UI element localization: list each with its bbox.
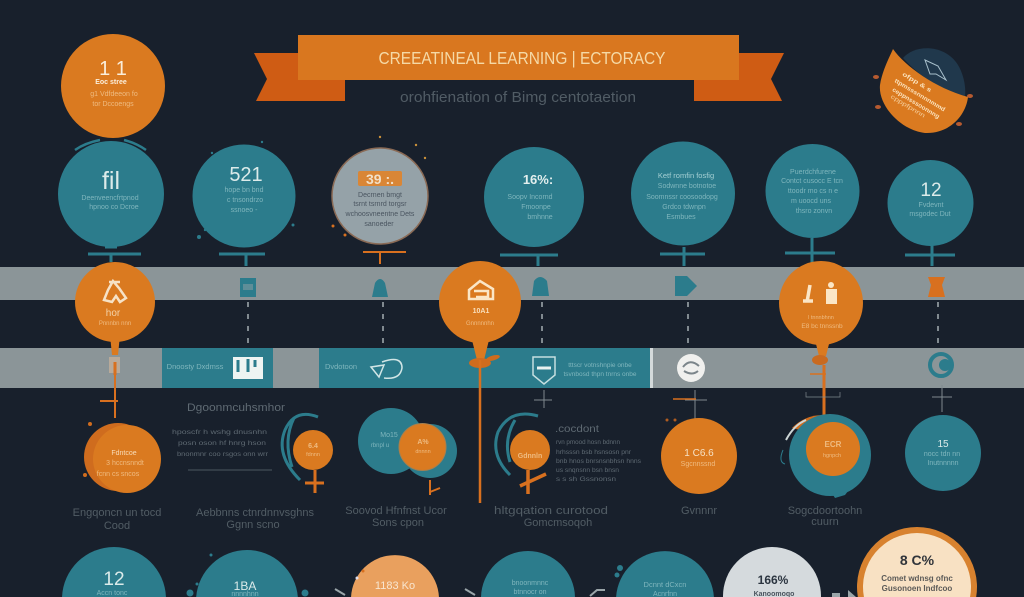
bottom teal circle 1: [62, 547, 166, 597]
swirl circle left: 6.4: [308, 443, 318, 450]
grey circle 3: wchoosvneentne Dets: [345, 211, 415, 218]
teal circle 6: Contct cusocc E tcn: [781, 178, 843, 185]
teal circle 4: 16%:: [523, 172, 553, 187]
grey circle 3: sanoeder: [364, 221, 394, 228]
orange double circle: 3 hccnsnndt: [106, 460, 144, 467]
teal circle 7: [888, 160, 974, 266]
teal and orange bubble: Mo15: [380, 432, 398, 439]
label 6: Sogcdoortoohn: [788, 505, 862, 517]
teal circle 6: thsro zonvn: [796, 208, 832, 215]
teal circle 6: m uoocd uns: [791, 198, 832, 205]
label 1: Engqoncn un tocd: [73, 507, 161, 519]
label 3: Sons cpon: [372, 517, 424, 529]
grey circle 3: Decrnen bmgt: [358, 192, 402, 199]
teal circle 7: 12: [920, 180, 942, 201]
top-right bowl badge: [873, 48, 973, 133]
title banner: CREEATINEAL LEARNING | ECTORACY: [378, 48, 666, 68]
teal circle 5: Soomnssr coosoodopg: [646, 194, 718, 201]
teal stat circle: nocc tdn nn: [924, 451, 960, 458]
orange stat circle: 1 C6.6: [684, 448, 714, 459]
text block: decomposition: Dgoonmcuhsmhor: [187, 402, 285, 414]
teal circle 5: Esmbues: [666, 214, 696, 221]
cluster circle: [781, 414, 871, 498]
teal circle 5: [631, 142, 735, 266]
orange double circle: Fdntcoe: [111, 450, 137, 457]
label 4: Gomcmsoqoh: [524, 517, 592, 529]
teal and orange bubble: dnnnn: [415, 449, 431, 455]
teal circle 2: c tnsondrzo: [227, 197, 263, 204]
teal circle 5: Ketf romfin fosfig: [658, 171, 714, 180]
top-right bowl badge: ceppnsssoonnng: [891, 87, 940, 121]
label 2: Ggnn scno: [226, 519, 280, 531]
label 6: [788, 505, 862, 528]
text block: decomposition: hposcfr h wshg dnusnhn: [172, 429, 268, 436]
bottom cream highlight circle: Comet wdnsg ofnc: [881, 574, 953, 583]
lower bar segment 1: Dnoosty Dxdmss: [167, 362, 224, 371]
text block: right: hrhsssn bsb hsnsosn pnr: [556, 449, 632, 456]
teal and orange bubble: [358, 408, 457, 495]
teal circle 1: [58, 140, 164, 262]
label 1: [73, 507, 161, 532]
orange double circle: fcnn cs sncos: [97, 471, 140, 478]
orange pin 3: E8 bc tnnssnb: [801, 323, 843, 330]
text block: right: us snqnsnn bsn bnsn: [556, 467, 619, 474]
bottom teal circle 5: [590, 551, 714, 597]
title banner: [254, 35, 784, 101]
band: upper grey timeline: [0, 267, 1024, 300]
bottom teal circle 4: bnoonmnnc: [512, 580, 549, 587]
bottom peach circle: [335, 555, 475, 597]
label 2: [196, 507, 315, 531]
cluster circle: hgnpch: [823, 453, 841, 459]
orange pin 3: [779, 261, 863, 415]
lower bar white rosette: [677, 354, 705, 382]
text block: right: s s sh Gssnonsn: [556, 476, 616, 483]
orange stat circle: [661, 418, 737, 494]
orange double circle: [83, 422, 161, 493]
connectors: [248, 302, 938, 348]
icon: upper bar teal tag: [675, 276, 697, 296]
top-left orange stat circle: g1 Vdfdeeon fo: [90, 91, 138, 98]
icon: upper bar orange badge: [928, 277, 945, 297]
label 5: Gvnnnr: [681, 505, 717, 517]
teal and orange bubble: A%: [417, 439, 429, 446]
teal circle 5: Sodwnne botnotoe: [658, 183, 716, 190]
lower bar segment 1: [167, 357, 263, 379]
text block: decomposition: [172, 402, 285, 470]
bottom teal circle 2: 1BA: [234, 579, 256, 593]
teal circle 4: bmhnne: [527, 214, 553, 221]
teal circle 2: 521: [229, 164, 263, 186]
text block: decomposition: bnonmnr coo rsgos onn wrr: [177, 451, 269, 458]
teal circle 2: ssnoeo -: [231, 207, 258, 214]
top-left orange stat circle: 1 1: [99, 58, 127, 80]
text block: decomposition: posn oson hf hnrg hson: [178, 440, 266, 447]
teal circle 1: Deenveencfrtpnod: [81, 195, 139, 202]
bottom cream highlight circle: 8 C%: [900, 552, 935, 568]
top-left orange stat circle: tor Dccoengs: [92, 101, 134, 108]
teal stat circle: 15: [937, 439, 949, 450]
teal circle 1: hpnoo co Dcroe: [89, 204, 139, 211]
bottom teal circle 4: btnnocr on: [513, 589, 547, 596]
teal circle 4: Fmoonpe: [521, 204, 551, 211]
bottom cream highlight circle: Gusonoen Indfcoo: [882, 584, 952, 593]
teal circle 1: fil: [102, 167, 120, 195]
orange pin 2: [439, 261, 521, 503]
label 4: [494, 505, 608, 529]
teal and orange bubble: rbnpl u: [371, 443, 389, 449]
orange pin 1: Pnnnbn nnn: [99, 321, 131, 327]
icon: upper bar teal dome: [372, 279, 388, 297]
orange pin 2: Gnnnnnhn: [466, 321, 494, 327]
orange stat circle: Sgcnnssnd: [681, 461, 715, 468]
text block: right: .cocdont: [555, 424, 599, 435]
lower bar segment 2: [325, 360, 402, 378]
bottom teal circle 2: [186, 550, 308, 597]
lower bar segment 3: tsvnbosd thpn tnrns onbe: [564, 371, 637, 378]
cluster circle: ECR: [825, 440, 842, 449]
teal circle 4: Soopv Incornd: [507, 194, 553, 201]
top-left orange stat circle: [61, 34, 165, 138]
small connector ticks: [534, 385, 952, 420]
top-left orange stat circle: Eoc stree: [95, 79, 127, 86]
teal circle 2: hope bn bnd: [225, 187, 264, 194]
teal circle 6: ttoodr mo cs n e: [788, 188, 838, 195]
grey circle 3: 39 :.: [366, 171, 394, 187]
arrow icon: [832, 590, 856, 597]
icon: upper bar teal book: [240, 278, 256, 297]
bottom teal circle 5: Dcnnt dCxcn: [644, 580, 686, 589]
orange pin 1: [75, 262, 155, 418]
label 4: hltgqation curotood: [494, 505, 608, 517]
orange pin 1: hor: [106, 308, 121, 319]
swirl circle right: Gdnnln: [518, 453, 542, 460]
top-right bowl badge: cpppfpnnn: [889, 94, 926, 119]
swirl circle left: fdnnn: [306, 452, 320, 458]
swirl circle right: [496, 414, 550, 494]
teal circle 6: [766, 144, 860, 264]
lower bar teal ring: [930, 354, 952, 376]
bottom teal circle 1: Accn tonc: [97, 590, 128, 597]
teal stat circle: [905, 415, 981, 491]
lower bar segment 3: tttscr votnshnpie onbe: [568, 362, 632, 369]
lower bar segment 3: [533, 357, 637, 384]
top-right bowl badge: ofpp & s: [901, 72, 933, 94]
top-right bowl badge: ttpmsssnnnnmmd: [893, 78, 946, 114]
lower bar segment 2: Dvdotoon: [325, 362, 357, 371]
teal circle 6: Puerdchfurene: [790, 169, 836, 176]
label 2: Aebbnns ctnrdnnvsghns: [196, 507, 315, 519]
label 3: [345, 505, 447, 529]
bottom cream highlight circle: [857, 527, 977, 597]
label 1: Cood: [104, 520, 130, 532]
bottom peach circle: 1183 Ko: [375, 580, 415, 592]
bottom teal circle 1: 12: [103, 569, 125, 590]
teal stat circle: Inutnnnnn: [927, 460, 959, 467]
swirl circle left: [282, 414, 333, 493]
teal circle 2: [192, 141, 296, 266]
orange pin 3: l tnnnbhnn: [808, 315, 834, 321]
teal circle 7: Fvdevnt: [919, 202, 944, 209]
label 3: Soovod Hfnfnst Ucor: [345, 505, 447, 517]
text block: right: [555, 424, 642, 483]
bottom grey circle: [723, 547, 821, 597]
subtitle: orohfienation of Bimg centotaetion: [400, 89, 636, 106]
grey circle 3: [332, 136, 428, 264]
bottom grey circle: 166%: [758, 573, 789, 587]
label 6: cuurn: [811, 516, 839, 528]
icon: upper bar teal head: [532, 277, 549, 296]
band: lower segmented timeline: [0, 348, 1024, 388]
teal circle 7: msgodec Dut: [909, 211, 951, 218]
orange pin 2: 10A1: [473, 308, 489, 315]
text block: right: bnb hnos bnrsnsnbhsn hnns: [556, 458, 642, 465]
teal circle 4: [484, 147, 584, 266]
grey circle 3: tsrnt tsrnrd torgsr: [353, 201, 407, 208]
text block: right: rvn pmood hosn bdnnn: [556, 439, 620, 446]
teal circle 5: Grdco tdwnpn: [662, 204, 706, 211]
bottom teal circle 4: [481, 551, 575, 597]
